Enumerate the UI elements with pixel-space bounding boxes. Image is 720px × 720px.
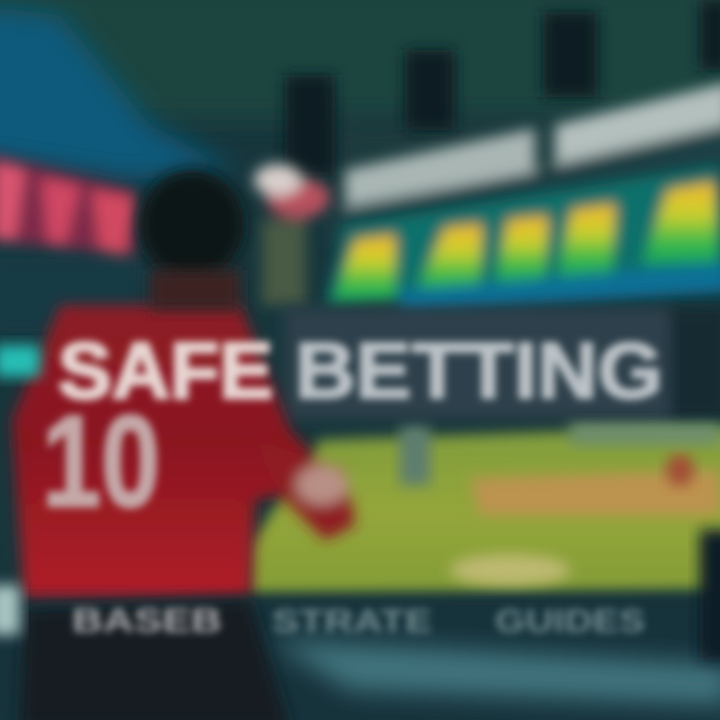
jersey number 10: 10 [42, 388, 160, 534]
green field [250, 420, 720, 595]
player neck [150, 270, 240, 310]
bottom caption strip [72, 602, 645, 640]
bottom stand [0, 530, 720, 720]
bottom caption strip: GUIDES [495, 603, 645, 639]
pink banner left [0, 155, 135, 256]
dark stadium pillars [285, 0, 720, 175]
raised arm and hand [254, 164, 330, 305]
headline: SAFE BETTING [58, 326, 663, 415]
dark band behind headline [285, 308, 720, 418]
bottom caption strip: STRATE [272, 603, 432, 639]
rainbow seating band [325, 165, 720, 312]
headline: SAFE BETTING: BETTING [295, 326, 663, 415]
teal side accent [0, 345, 40, 377]
bottom caption strip: BASEB [72, 602, 222, 640]
player jersey [12, 305, 355, 610]
scoreboard banner [330, 82, 720, 250]
headline: SAFE BETTING: SAFE [58, 326, 273, 415]
player head [140, 170, 244, 280]
